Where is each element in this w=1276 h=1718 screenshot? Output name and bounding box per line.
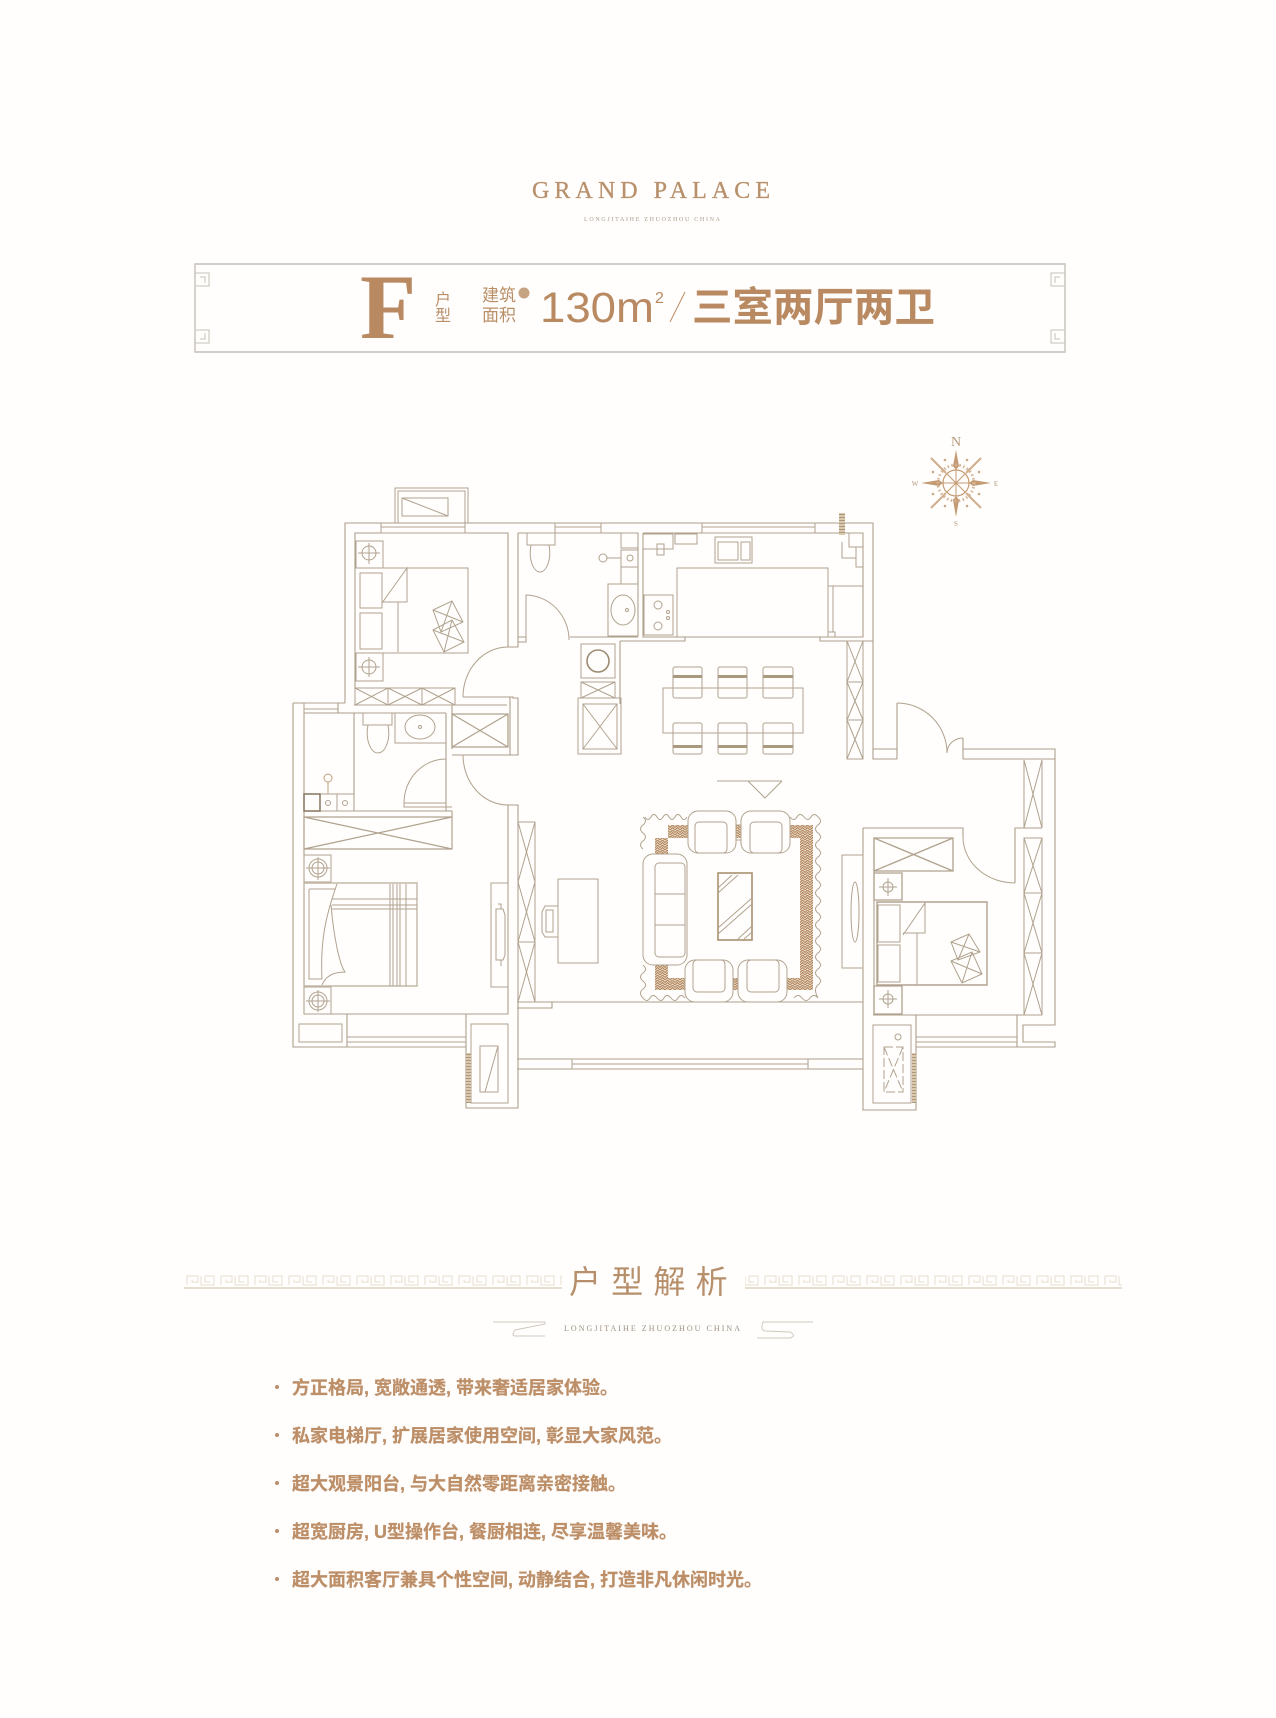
bullet 3: 超大观景阳台, 与大自然零距离亲密接触。 bbox=[292, 1473, 626, 1494]
dining wardrobe bbox=[847, 641, 863, 759]
area value: 2 bbox=[655, 290, 664, 307]
south-east balcony closet bbox=[873, 1025, 916, 1103]
study wardrobe, desk and chair bbox=[518, 822, 598, 1002]
panel: unit type banner bbox=[195, 256, 1065, 358]
subtitle with scroll ornaments: LONGJITAIHE ZHUOZHOU CHINA bbox=[564, 1324, 740, 1333]
sofa set bbox=[643, 811, 790, 1002]
floor plan bbox=[293, 488, 1055, 1110]
north-west bedroom bbox=[355, 541, 468, 705]
washer and shaft bbox=[578, 644, 621, 754]
icon: compass bbox=[912, 435, 998, 528]
unit letter F: F bbox=[360, 256, 416, 358]
text block: analysis bullet list bbox=[275, 1377, 762, 1590]
windows bbox=[304, 523, 1017, 1069]
bullet 1: 方正格局, 宽敞通透, 带来奢适居家体验。 bbox=[292, 1377, 618, 1398]
doors bbox=[404, 595, 1015, 883]
dining table and chairs bbox=[663, 667, 803, 754]
north balcony planter bbox=[395, 488, 468, 523]
title: GRAND PALACE: GRAND PALACE bbox=[532, 178, 770, 204]
key pattern band right bbox=[745, 1274, 1122, 1289]
west bathroom bbox=[304, 713, 508, 811]
bullet 5: 超大面积客厅兼具个性空间, 动静结合, 打造非凡休闲时光。 bbox=[292, 1569, 762, 1590]
area value: 130m bbox=[540, 284, 654, 332]
rug bbox=[640, 814, 820, 1000]
area label bbox=[482, 281, 530, 326]
south-east bedroom bbox=[842, 838, 987, 1014]
title: GRAND PALACE bbox=[532, 178, 770, 223]
unit type label: 户 bbox=[435, 286, 451, 310]
icon: compass: N bbox=[951, 435, 961, 450]
icon: compass: E bbox=[994, 480, 998, 488]
east wardrobe bbox=[1024, 760, 1042, 1015]
south-west balcony closet bbox=[299, 1024, 508, 1103]
section heading: 户型解析: 户型解析 bbox=[569, 1257, 738, 1303]
section heading: 户型解析 bbox=[184, 1257, 1122, 1338]
area label: 建筑 bbox=[482, 281, 516, 306]
unit type label bbox=[435, 286, 451, 326]
key pattern band left bbox=[184, 1274, 562, 1289]
master bedroom bbox=[304, 817, 508, 1014]
bullet 4: 超宽厨房, U型操作台, 餐厨相连, 尽享温馨美味。 bbox=[292, 1521, 677, 1542]
icon: compass: W bbox=[912, 480, 919, 488]
area label: 面积 bbox=[482, 301, 516, 326]
bullet 2: 私家电梯厅, 扩展居家使用空间, 彰显大家风范。 bbox=[292, 1425, 672, 1446]
unit type label: 型 bbox=[435, 302, 451, 326]
view marker bbox=[717, 781, 782, 798]
kitchen bbox=[643, 513, 863, 637]
room layout heading: 三室两厅两卫 bbox=[692, 274, 935, 333]
walls bbox=[293, 523, 1055, 1110]
title: GRAND PALACE: LONGJITAIHE ZHUOZHOU CHINA bbox=[584, 217, 721, 223]
icon: compass: S bbox=[954, 520, 958, 528]
north bathroom bbox=[527, 533, 638, 636]
subtitle with scroll ornaments bbox=[493, 1322, 813, 1338]
